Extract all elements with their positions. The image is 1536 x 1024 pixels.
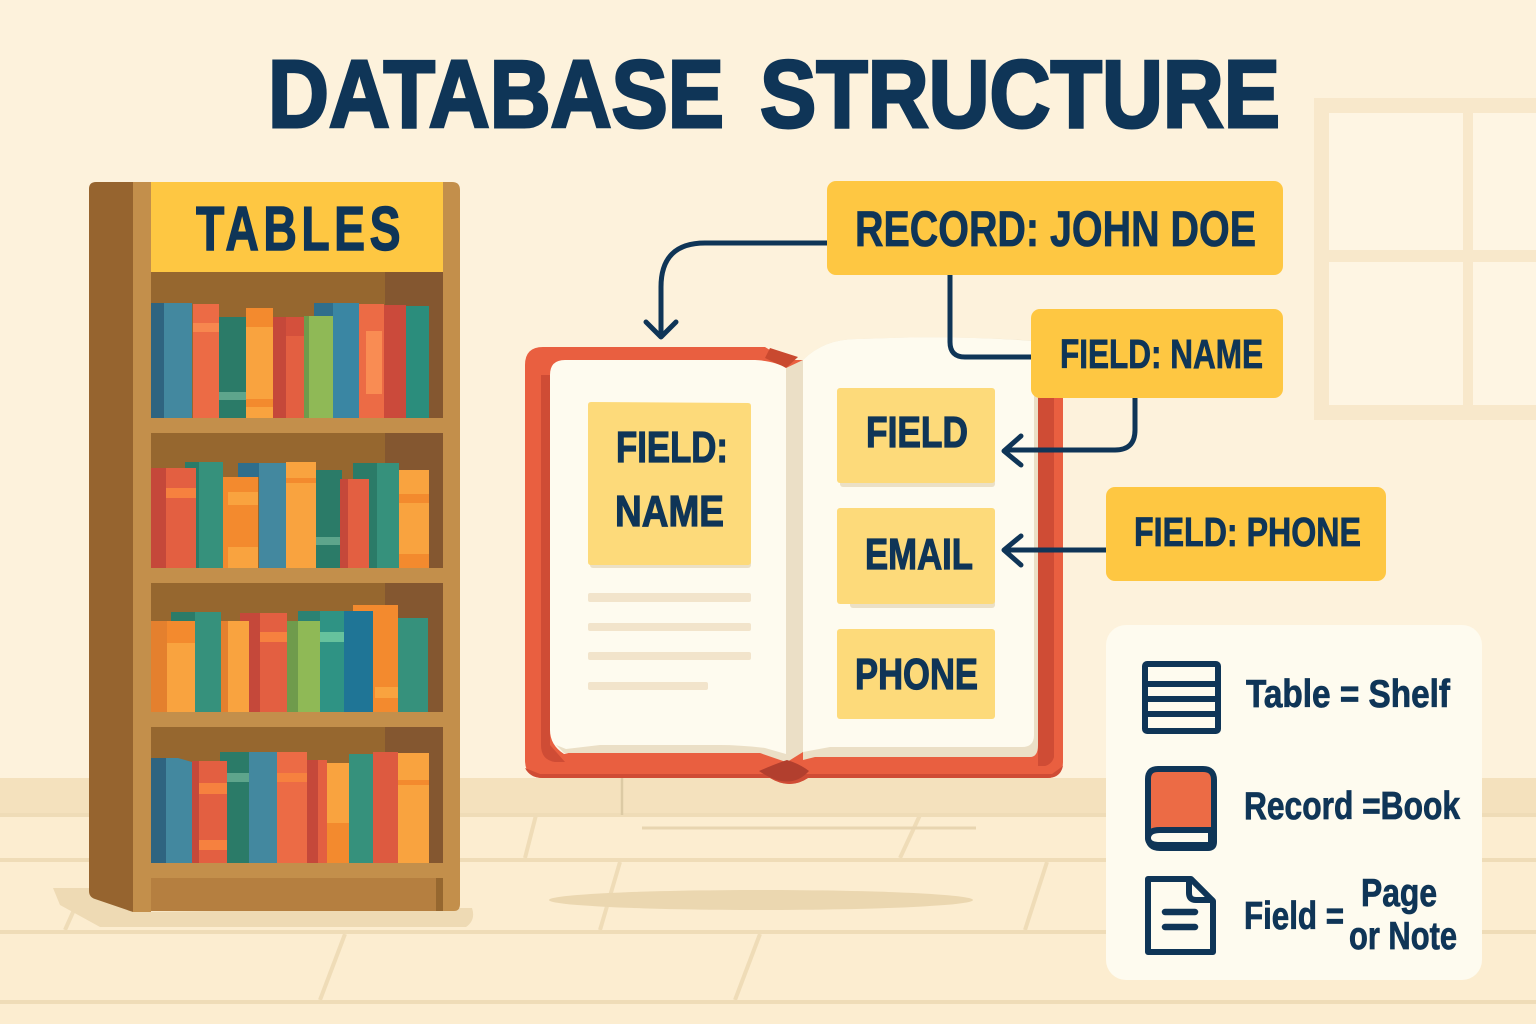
arrow: field name to field bbox=[1004, 397, 1135, 465]
right page bbox=[803, 337, 1038, 760]
note: email bbox=[837, 508, 995, 608]
panel: legend bbox=[1106, 625, 1482, 980]
bookshelf frame bbox=[133, 182, 460, 912]
callout: record john doe: RECORD: JOHN DOE bbox=[855, 201, 1256, 257]
books: shelf 1 bbox=[151, 303, 429, 418]
book shadow on floor bbox=[549, 890, 973, 910]
arrow: field phone to email bbox=[1004, 536, 1106, 565]
icon: book bbox=[1148, 769, 1214, 848]
cover shading bbox=[525, 375, 1063, 784]
note: field: FIELD bbox=[866, 408, 968, 457]
title: DATABASE bbox=[268, 41, 724, 148]
books: shelf 4 bbox=[151, 752, 429, 863]
window bbox=[1314, 98, 1536, 420]
bookshelf side bbox=[89, 182, 133, 912]
callout: field phone: FIELD: PHONE bbox=[1134, 509, 1361, 555]
title: STRUCTURE bbox=[760, 41, 1280, 148]
book spine notch bbox=[759, 760, 809, 782]
panel: bookshelf bbox=[89, 182, 460, 912]
bookshelf back bbox=[151, 272, 443, 878]
cover fold bbox=[765, 348, 798, 368]
legend text: field bbox=[1244, 872, 1457, 958]
legend text: field: Field = bbox=[1244, 895, 1344, 938]
title bbox=[268, 41, 1280, 148]
left page bbox=[550, 360, 786, 761]
legend text: record: Record =Book bbox=[1244, 785, 1460, 828]
legend text: table: Table = Shelf bbox=[1246, 673, 1451, 716]
callout: field name bbox=[1031, 309, 1283, 398]
shelf header bbox=[151, 182, 443, 272]
icon: document bbox=[1148, 879, 1213, 952]
books: shelf 2 bbox=[151, 462, 429, 568]
page bottom shade bbox=[556, 745, 786, 762]
note: field bbox=[837, 388, 995, 487]
note: field name: NAME bbox=[615, 487, 724, 536]
connector: record to field name bbox=[950, 275, 1032, 357]
note: phone: PHONE bbox=[855, 650, 978, 699]
shelf heading: tables: TABLES bbox=[196, 195, 405, 264]
background wall bbox=[0, 0, 1536, 778]
note: email: EMAIL bbox=[865, 530, 973, 579]
callout: record john doe bbox=[827, 181, 1283, 275]
note: phone bbox=[837, 629, 995, 719]
bookcase shadow bbox=[53, 888, 473, 927]
gutter bbox=[786, 360, 803, 762]
callout: field phone bbox=[1106, 487, 1386, 581]
floor bbox=[0, 778, 1536, 1024]
page text lines bbox=[588, 593, 751, 690]
arrow: record to book bbox=[646, 243, 827, 337]
book cover bbox=[525, 347, 1063, 784]
callout: field name: FIELD: NAME bbox=[1060, 331, 1263, 377]
note: field name bbox=[588, 402, 751, 568]
legend text: field: Page bbox=[1361, 872, 1437, 915]
panel: open book bbox=[525, 337, 1063, 784]
icon: table bbox=[1145, 664, 1218, 731]
note: field name: FIELD: bbox=[616, 423, 728, 472]
legend text: field: or Note bbox=[1349, 915, 1457, 958]
books: shelf 3 bbox=[151, 605, 428, 712]
